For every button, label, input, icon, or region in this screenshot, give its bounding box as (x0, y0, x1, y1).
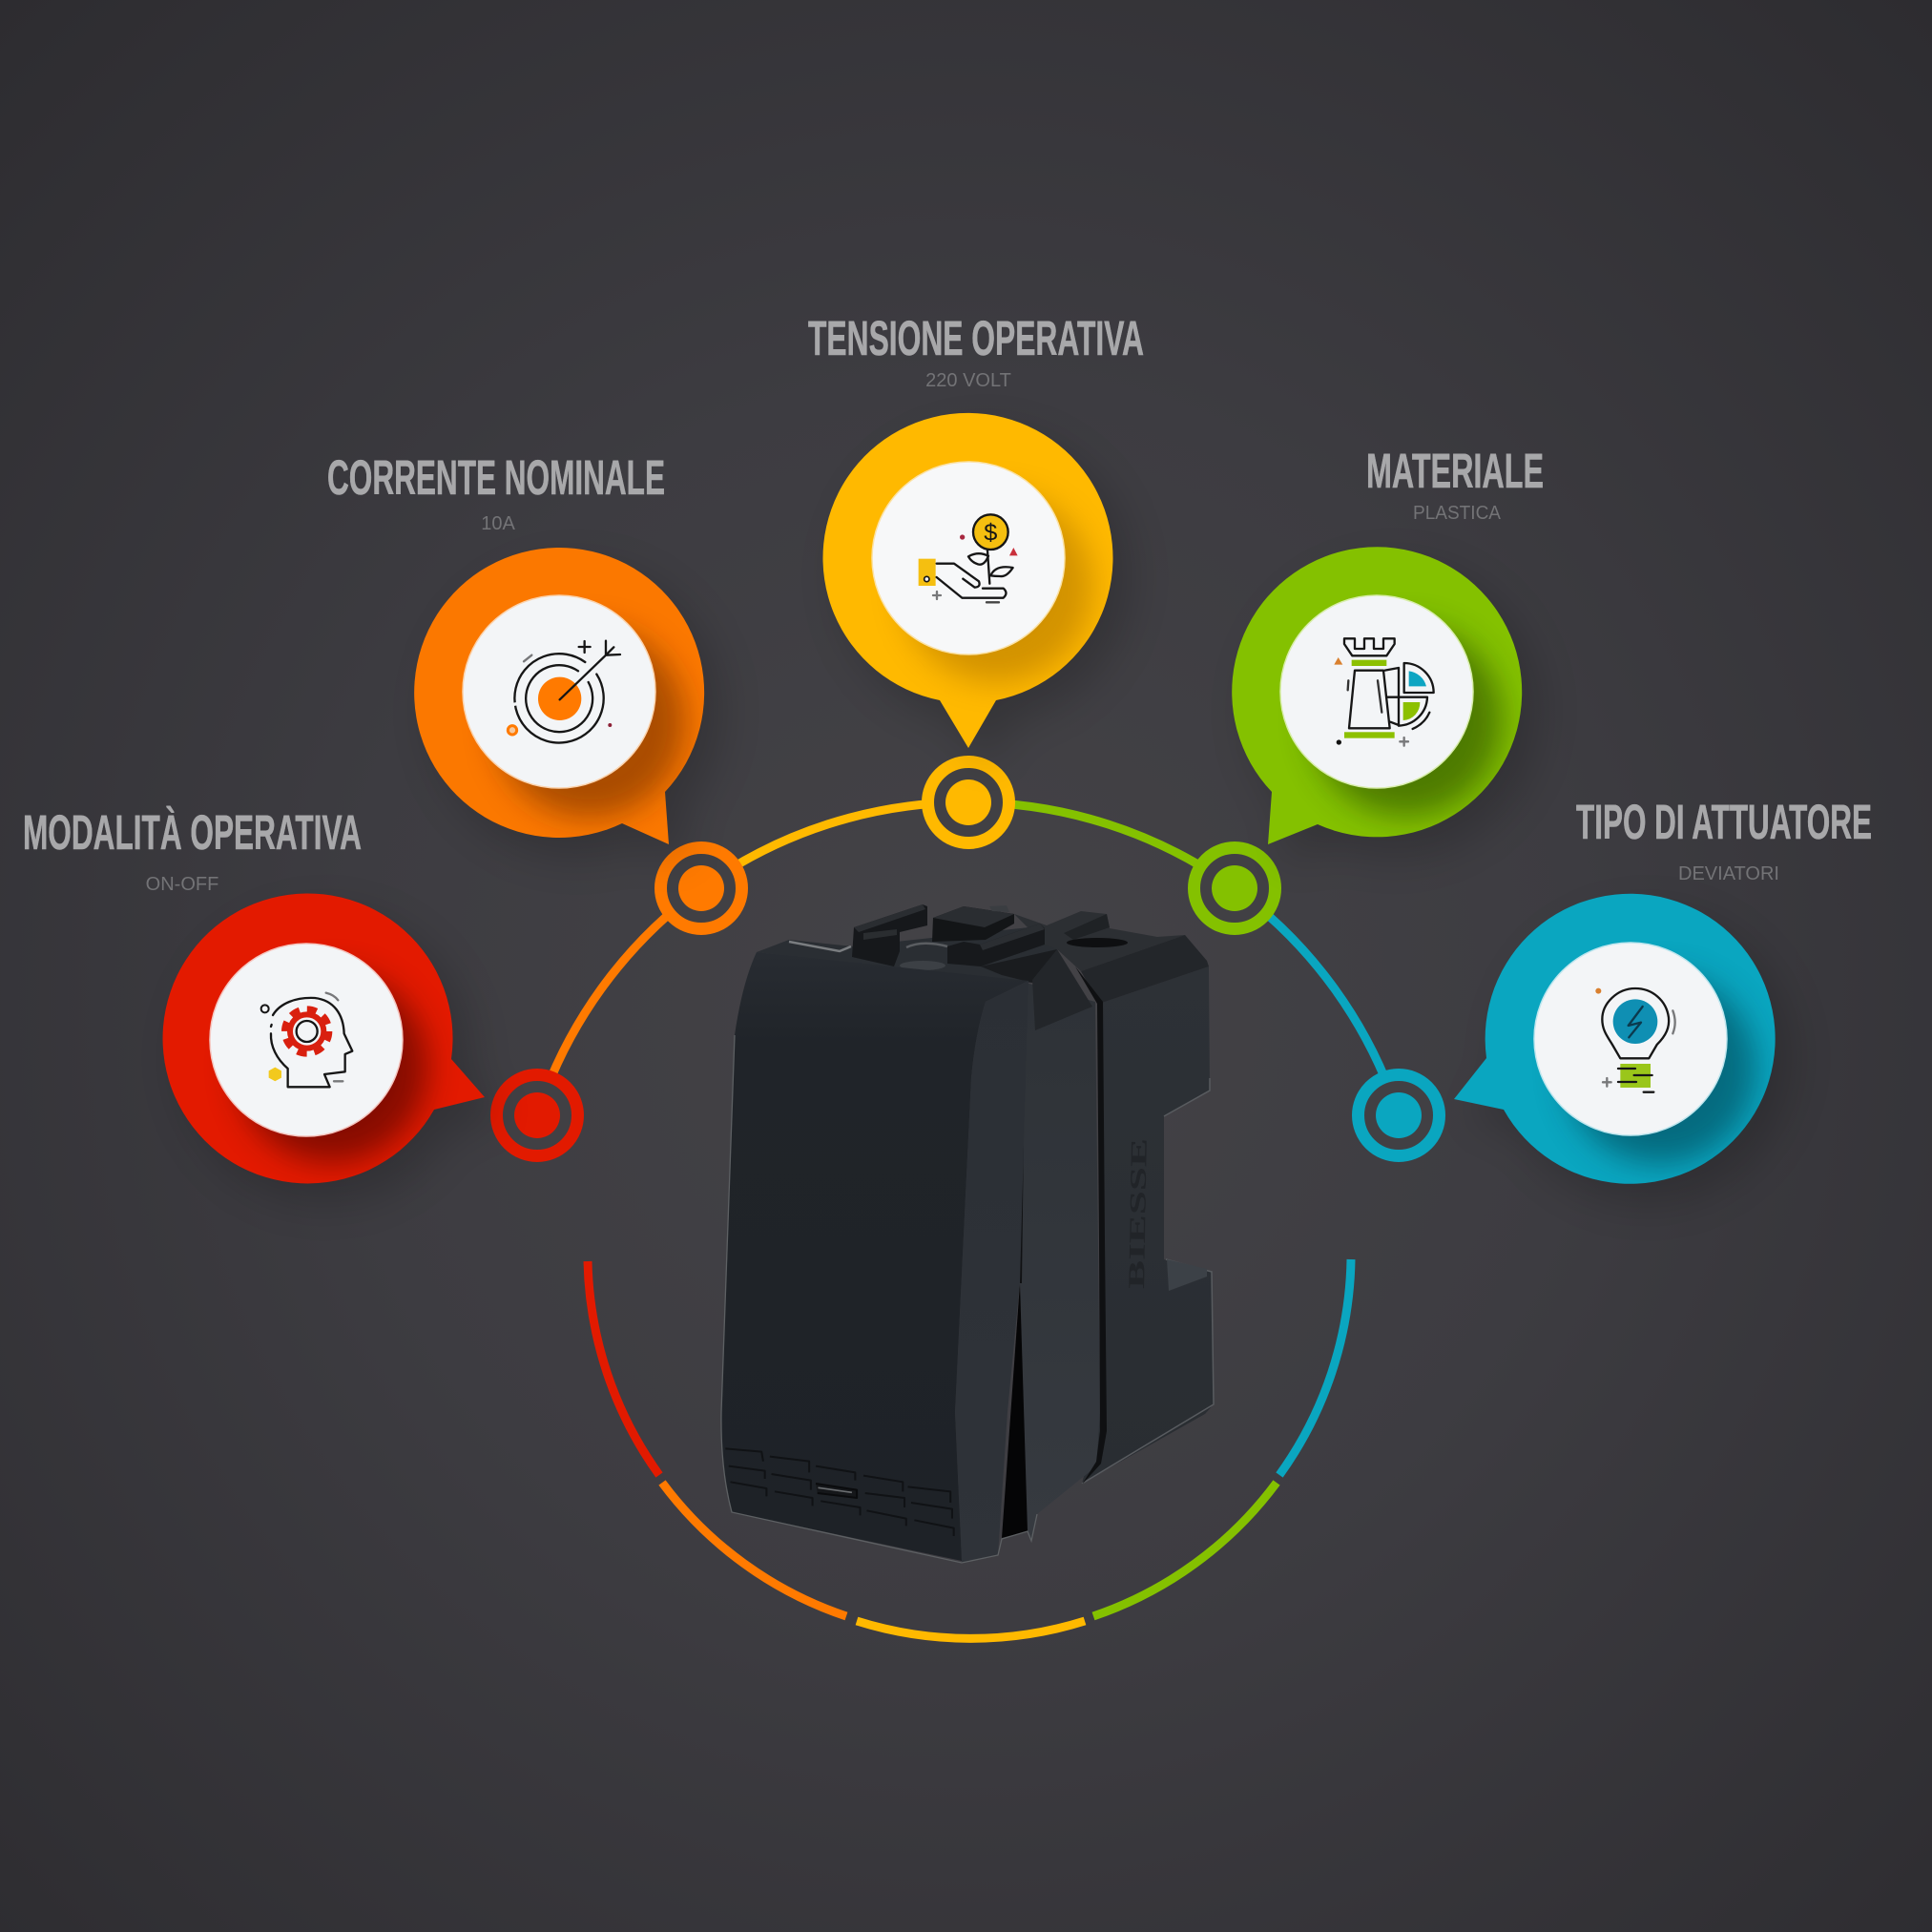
clip right (947, 924, 1045, 966)
lower ring arcs (588, 1259, 1351, 1638)
icon: light bulb (1595, 988, 1675, 1092)
rear shelf (757, 925, 1057, 983)
dark slit (1075, 966, 1107, 1485)
node: orange (660, 847, 742, 929)
node: red (496, 1074, 578, 1156)
icon: hand with coin plant (919, 514, 1018, 602)
icon: target and arrow (508, 641, 620, 743)
panel: materiale bubble (1232, 547, 1539, 863)
node: green (1195, 847, 1275, 929)
clip centre (932, 906, 1014, 942)
node: blue (1359, 1074, 1439, 1156)
upper ring arcs (537, 802, 1399, 1115)
icon: chess rook and pie chart (1334, 638, 1434, 746)
panel: tipo di attuatore bubble (1454, 894, 1793, 1203)
panel: corrente nominale bubble (414, 548, 721, 863)
heading: materiale: MATERIALE (1366, 444, 1544, 498)
vent slots (725, 1448, 954, 1536)
upper rear body (1014, 911, 1185, 971)
value: 10A: 10A (481, 513, 515, 534)
icon: head with gear (261, 993, 352, 1087)
heading: tensione operativa: TENSIONE OPERATIVA (808, 311, 1144, 365)
product: black switch module (721, 904, 1214, 1563)
rocker side strip (955, 981, 1028, 1563)
wedge gap (1002, 1283, 1028, 1538)
clip left (852, 904, 927, 966)
value: plastica: PLASTICA (1413, 503, 1502, 524)
heading: corrente nominale: CORRENTE NOMINALE (327, 450, 665, 505)
panel: modalità operativa bubble (163, 893, 502, 1202)
value: deviatori: DEVIATORI (1678, 863, 1779, 884)
heading: modalità operativa: MODALITÀ OPERATIVA (23, 805, 362, 860)
icon: hand with coin plant: $ (984, 520, 997, 547)
middle section (1020, 983, 1100, 1541)
brand mark: BIESSE (1125, 1138, 1153, 1289)
value: on-off: ON-OFF (146, 874, 218, 895)
front face (721, 952, 1028, 1561)
panel: tensione operativa bubble (822, 413, 1130, 767)
right section (1082, 966, 1214, 1484)
node: yellow (927, 761, 1009, 843)
value: 220 volt: 220 VOLT (925, 370, 1011, 391)
